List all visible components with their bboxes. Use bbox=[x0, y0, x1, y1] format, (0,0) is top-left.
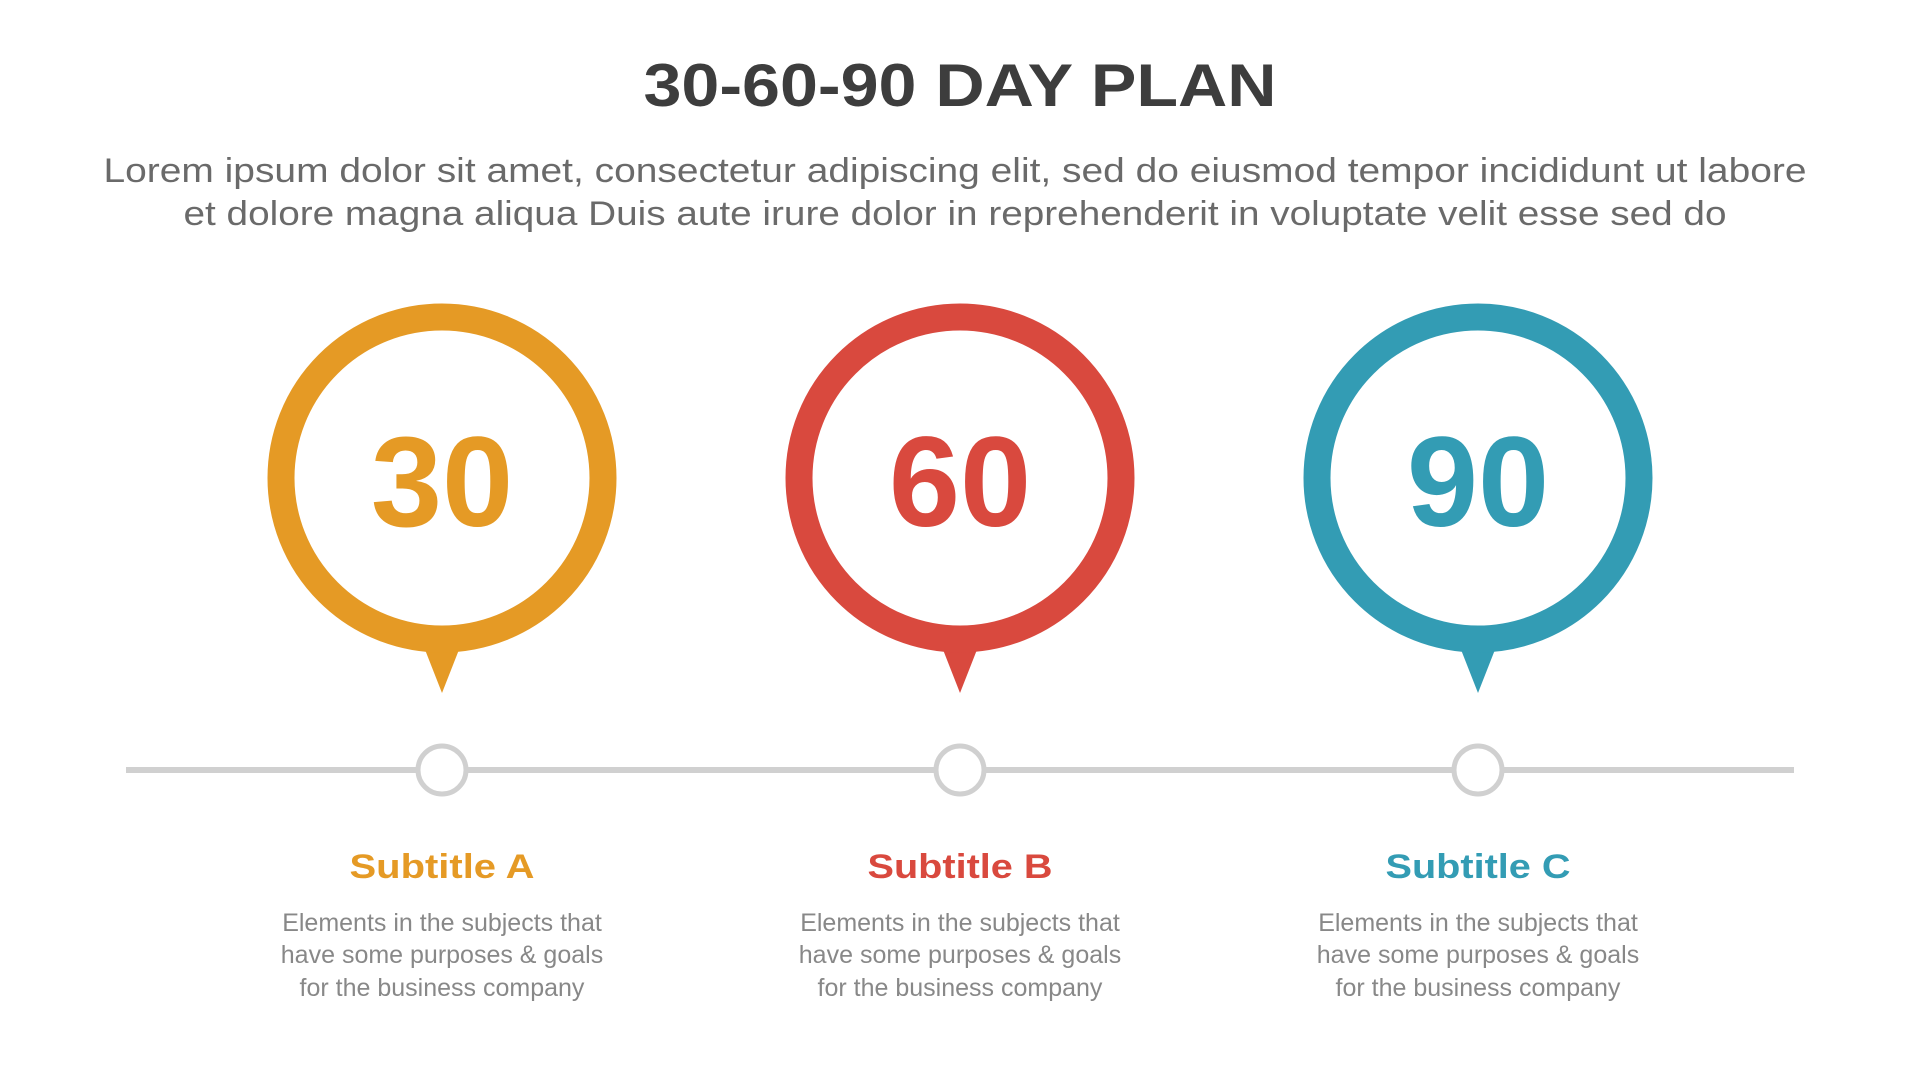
pin: 60: 60 bbox=[889, 411, 1031, 554]
pin: 90 bbox=[1317, 317, 1639, 693]
description B: Elements in the subjects that bbox=[800, 909, 1120, 937]
description C: have some purposes & goals bbox=[1317, 941, 1639, 969]
description C: Elements in the subjects that bbox=[1318, 909, 1638, 937]
pin: 60 bbox=[799, 317, 1121, 693]
pin: 30 bbox=[281, 317, 603, 693]
intro text: Lorem ipsum dolor sit amet, consectetur adipiscing elit, sed do eiusmod tempor incididunt ut labore bbox=[104, 152, 1807, 190]
milestone A bbox=[281, 317, 603, 1002]
timeline node B bbox=[936, 746, 984, 794]
description C bbox=[1317, 909, 1639, 1002]
description B: for the business company bbox=[818, 974, 1103, 1002]
title: 30-60-90 DAY PLAN bbox=[644, 52, 1276, 119]
subtitle A: Subtitle A bbox=[350, 848, 534, 886]
description A: have some purposes & goals bbox=[281, 941, 603, 969]
pin: 30: 30 bbox=[371, 411, 513, 554]
description C: for the business company bbox=[1336, 974, 1621, 1002]
pin: 90: 90 bbox=[1407, 411, 1549, 554]
description B: have some purposes & goals bbox=[799, 941, 1121, 969]
description A: for the business company bbox=[300, 974, 585, 1002]
subtitle B: Subtitle B bbox=[868, 848, 1052, 886]
milestone C bbox=[1317, 317, 1639, 1002]
intro text: et dolore magna aliqua Duis aute irure dolor in reprehenderit in voluptate velit esse sed do bbox=[184, 195, 1726, 233]
subtitle C: Subtitle C bbox=[1386, 848, 1570, 886]
intro text bbox=[104, 152, 1807, 233]
timeline node A bbox=[418, 746, 466, 794]
description B bbox=[799, 909, 1121, 1002]
timeline node C bbox=[1454, 746, 1502, 794]
description A: Elements in the subjects that bbox=[282, 909, 602, 937]
milestone B bbox=[799, 317, 1121, 1002]
timeline line bbox=[126, 767, 1794, 773]
description A bbox=[281, 909, 603, 1002]
